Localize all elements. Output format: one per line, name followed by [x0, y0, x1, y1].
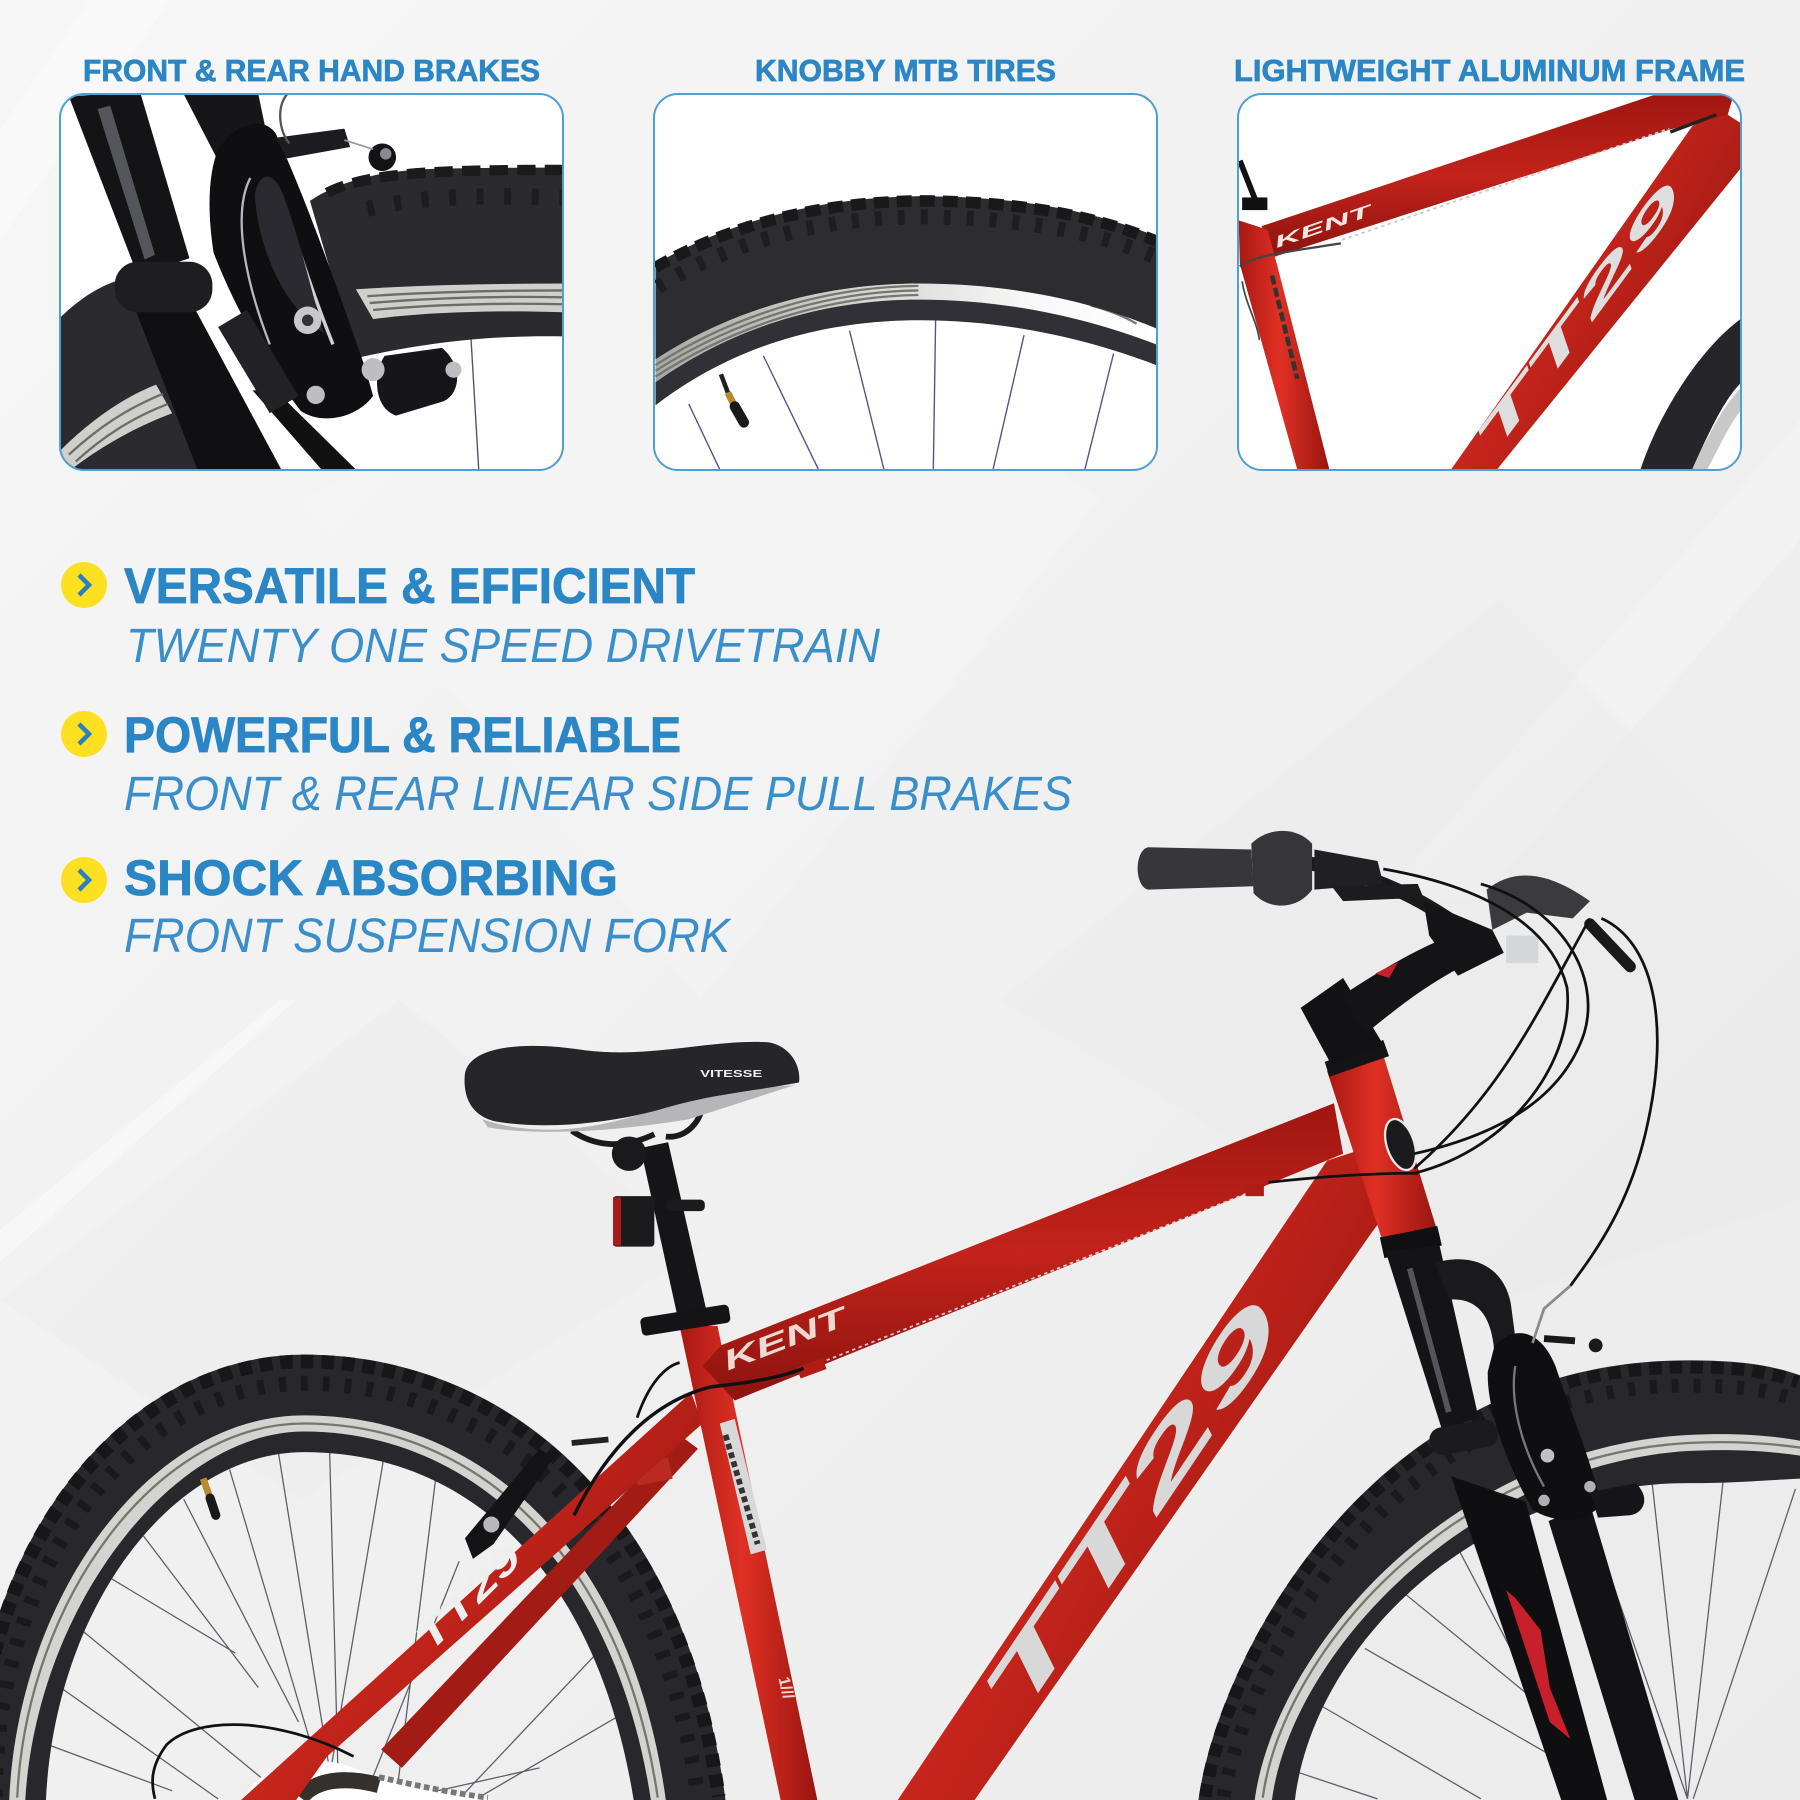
- handlebar and grip: [1138, 831, 1630, 976]
- brake pad and bolts: [294, 307, 461, 416]
- feature 2: powerful and reliable: FRONT & REAR LINEAR SIDE PULL BRAKES: [124, 768, 1072, 821]
- seat stay: TT29: [407, 1536, 530, 1659]
- head badge: [1379, 1115, 1422, 1174]
- saddle: VITESSE: [700, 1069, 762, 1080]
- rear wheel: [0, 1355, 726, 1800]
- valve stem: [203, 1479, 216, 1515]
- top tube: [703, 1103, 1343, 1401]
- front wheel: [1198, 1360, 1800, 1800]
- cassette and chain: [243, 1760, 494, 1800]
- top tube: [1262, 95, 1733, 257]
- seat tube: [680, 1326, 817, 1800]
- front section of tire: [61, 281, 198, 469]
- seat post: [613, 1142, 731, 1336]
- bullet icon: [61, 857, 107, 903]
- bicycle illustration: [0, 831, 1800, 1800]
- suspension fork: [1386, 1246, 1678, 1800]
- down tube: TT29: [965, 1288, 1301, 1733]
- feature 1: versatile and efficient: [61, 558, 880, 673]
- rear of front wheel: [1640, 319, 1740, 470]
- feature 2: powerful and reliable: [61, 707, 1072, 821]
- head tube: [1327, 1052, 1436, 1240]
- down tube: TT29: [1465, 176, 1693, 462]
- rear section of tire: [310, 168, 563, 358]
- feature 1: versatile and efficient: VERSATILE & EFFICIENT: [124, 558, 695, 614]
- rim and tire: [656, 196, 1156, 408]
- top tube: KENT: [1272, 201, 1376, 252]
- caliper arm: [210, 94, 396, 418]
- seat post and cables: [1240, 115, 1716, 340]
- seat stay: [241, 1392, 703, 1800]
- seat tube: 1///: [774, 1675, 797, 1701]
- headset rings: [1325, 1040, 1442, 1258]
- heading: front and rear hand brakes: FRONT & REAR HAND BRAKES: [83, 53, 540, 88]
- panel: brake close-up: [60, 92, 563, 470]
- bullet icon: [61, 711, 107, 757]
- down tube: [898, 1148, 1383, 1800]
- feature 1: versatile and efficient: TWENTY ONE SPEED DRIVETRAIN: [126, 620, 880, 673]
- down tube: [1451, 110, 1740, 470]
- feature 2: powerful and reliable: POWERFUL & RELIABLE: [124, 707, 681, 763]
- panel: aluminum frame close-up: [1238, 94, 1741, 470]
- panel: knobby tire close-up: [654, 94, 1157, 470]
- front brake: [1488, 1333, 1644, 1520]
- chain stay and brake bridge: [381, 1435, 698, 1768]
- valve stem: [721, 374, 744, 422]
- feature 3: shock absorbing: FRONT SUSPENSION FORK: [124, 910, 732, 963]
- feature 3: shock absorbing: [61, 850, 732, 963]
- stem: [1301, 932, 1472, 1065]
- heading: lightweight aluminum frame: LIGHTWEIGHT ALUMINUM FRAME: [1234, 53, 1745, 88]
- seat tube: [1239, 220, 1329, 470]
- feature 3: shock absorbing: SHOCK ABSORBING: [124, 850, 618, 906]
- bullet icon: [61, 562, 107, 608]
- heading: knobby MTB tires: KNOBBY MTB TIRES: [755, 53, 1056, 88]
- saddle: [465, 1042, 799, 1171]
- rear brake: [465, 1440, 608, 1559]
- brake and shifter cables: [153, 869, 1657, 1799]
- fork legs: [69, 92, 356, 470]
- top tube: KENT: [719, 1300, 853, 1376]
- spokes: [689, 319, 1114, 470]
